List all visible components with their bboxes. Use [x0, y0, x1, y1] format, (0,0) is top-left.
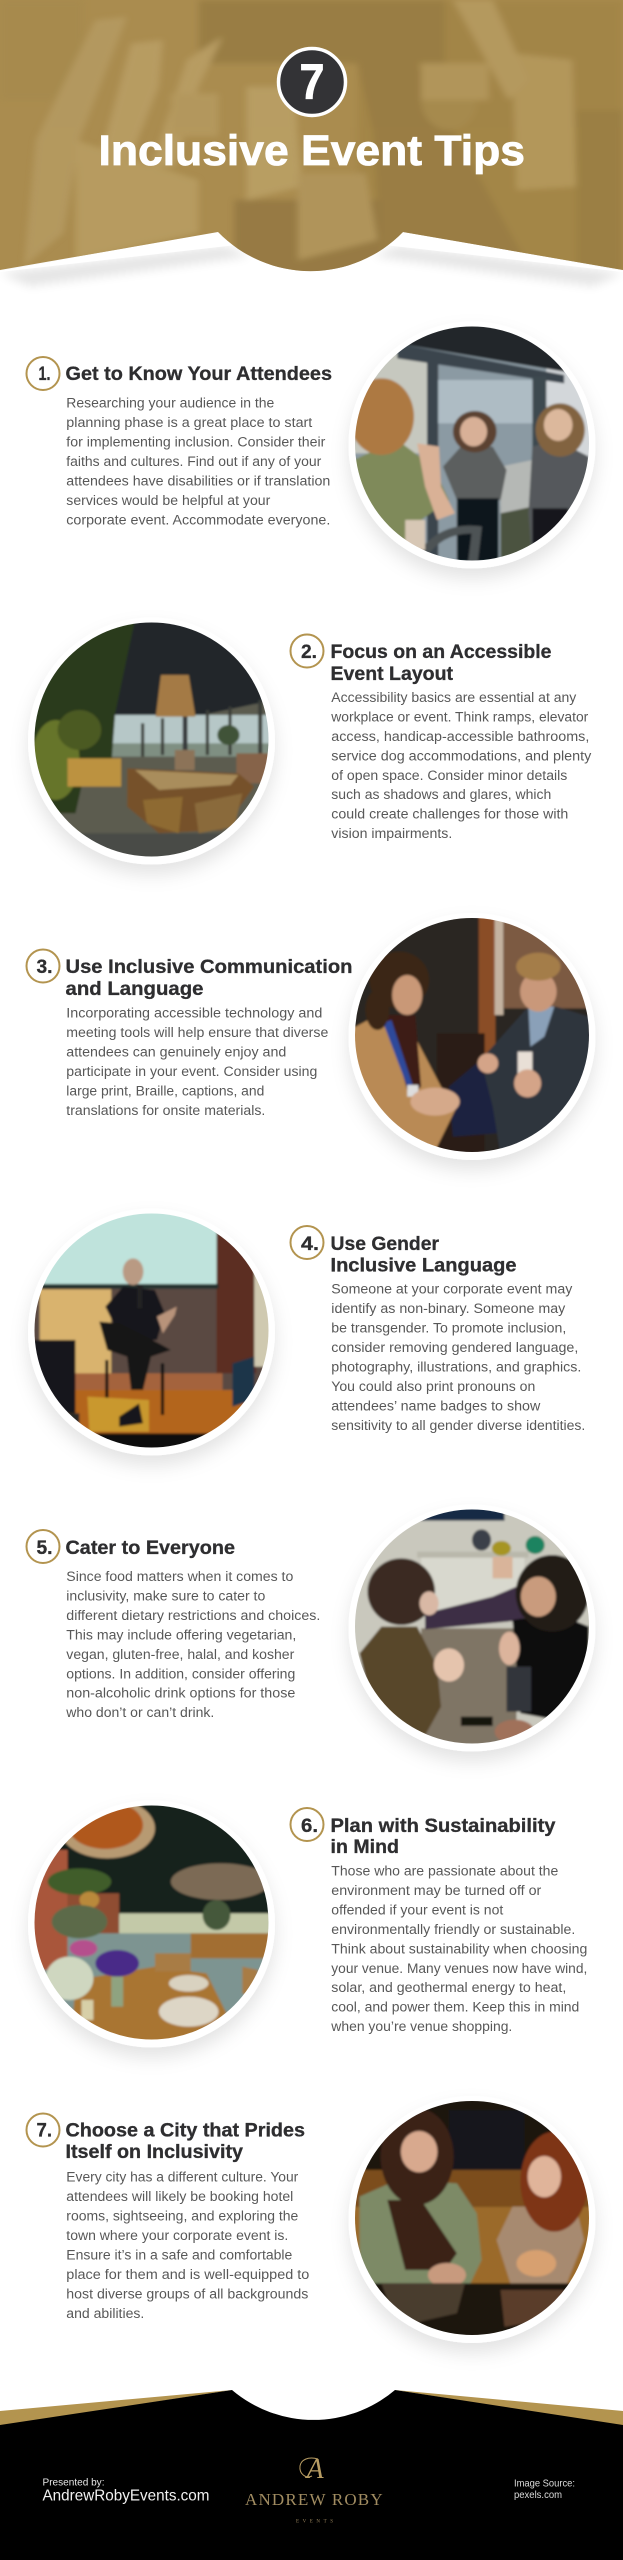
- footer black band: [0, 2390, 623, 2560]
- body text 5: Since food matters when it comes to: [66, 1569, 293, 1584]
- body text 3: meeting tools will help ensure that diverse: [66, 1025, 328, 1040]
- header number badge: 7: [300, 54, 324, 110]
- panel: tip 5: [26, 1504, 596, 1752]
- body text 2: vision impairments.: [331, 826, 452, 841]
- body text 2: service dog accommodations, and plenty: [331, 748, 592, 763]
- body text 2: workplace or event. Think ramps, elevator: [330, 710, 589, 724]
- heading 6: [330, 1815, 556, 1858]
- image source credit: Image Source:: [514, 2478, 575, 2490]
- photo: two men talking: [348, 913, 596, 1160]
- panel: header: [0, 0, 623, 286]
- body text 3: large print, Braille, captions, and: [66, 1083, 264, 1098]
- body text 7: [66, 2170, 309, 2321]
- number badge 2: 2.: [301, 641, 317, 663]
- image source credit: pexels.com: [514, 2489, 562, 2501]
- body text 6: Think about sustainability when choosing: [331, 1941, 587, 1956]
- body text 7: attendees will likely be booking hotel: [66, 2189, 293, 2204]
- logo: Andrew Roby Events: ANDREW ROBY: [245, 2490, 383, 2509]
- body text 1: services would be helpful at your: [66, 493, 271, 508]
- header shadow: [0, 232, 623, 286]
- title: Inclusive Event Tips: [98, 128, 525, 175]
- body text 3: Incorporating accessible technology and: [66, 1006, 322, 1020]
- body text 6: [330, 1864, 587, 2034]
- photo: two women smiling at a bar: [348, 2096, 596, 2343]
- panel: tip 6: [28, 1798, 587, 2048]
- body text 5: who don’t or can’t drink.: [65, 1705, 214, 1720]
- panel: tip 4: [28, 1208, 585, 1456]
- body text 2: [330, 690, 592, 841]
- heading 1: Get to Know Your Attendees: [66, 363, 332, 385]
- logo monogram: A: [304, 2454, 324, 2485]
- body text 7: place for them and is well-equipped to: [66, 2267, 309, 2282]
- body text 7: host diverse groups of all backgrounds: [66, 2286, 309, 2301]
- heading 4: [330, 1233, 517, 1277]
- number badge 1: 1.: [38, 363, 50, 385]
- body text 5: This may include offering vegetarian,: [66, 1627, 296, 1642]
- photo: banquet table with flowers: [28, 1798, 275, 2048]
- heading 2: [330, 641, 552, 685]
- logo: Andrew Roby Events: EVENTS: [296, 2520, 333, 2525]
- body text 5: options. In addition, consider offering: [66, 1666, 295, 1681]
- heading 4: Use Gender: [330, 1233, 439, 1255]
- body text 2: access, handicap-accessible bathrooms,: [331, 729, 589, 744]
- heading 6: in Mind: [330, 1836, 399, 1858]
- body text 2: could create challenges for those with: [331, 807, 568, 822]
- heading 7: Choose a City that Prides: [66, 2120, 305, 2142]
- photo: two women with sparklers: [348, 1504, 596, 1752]
- presented by credit: [42, 2477, 210, 2505]
- body text 5: different dietary restrictions and choices.: [66, 1608, 320, 1623]
- body text 1: attendees have disabilities or if translation: [66, 474, 330, 488]
- number badge 5: 5.: [36, 1537, 52, 1559]
- number badge 5: [26, 1530, 60, 1563]
- photo: speaker on stage: [28, 1208, 275, 1456]
- photo: three women toasting: [348, 322, 596, 568]
- body text 4: photography, illustrations, and graphics.: [331, 1360, 581, 1374]
- body text 6: environment may be turned off or: [331, 1883, 542, 1898]
- panel: footer: [0, 2390, 623, 2560]
- body text 5: vegan, gluten-free, halal, and kosher: [66, 1647, 295, 1662]
- header number badge: [278, 48, 346, 116]
- body text 2: such as shadows and glares, which: [331, 787, 551, 802]
- body text 6: environmentally friendly or sustainable.: [331, 1922, 575, 1937]
- heading 3: and Language: [66, 978, 204, 1000]
- body text 7: rooms, sightseeing, and exploring the: [66, 2209, 298, 2224]
- presented by credit: AndrewRobyEvents.com: [42, 2488, 210, 2505]
- body text 6: solar, and geothermal energy to heat,: [331, 1980, 566, 1995]
- body text 4: identify as non-binary. Someone may: [331, 1301, 566, 1316]
- photo: restaurant venue: [28, 618, 275, 864]
- body text 5: inclusivity, make sure to cater to: [66, 1588, 265, 1604]
- body text 4: You could also print pronouns on: [331, 1379, 535, 1394]
- logo: Andrew Roby Events: [245, 2454, 383, 2525]
- body text 5: [65, 1569, 320, 1720]
- body text 3: translations for onsite materials.: [66, 1103, 265, 1118]
- heading 2: Focus on an Accessible: [330, 641, 552, 663]
- heading 2: Event Layout: [330, 663, 454, 685]
- panel: tip 3: [26, 913, 596, 1160]
- number badge 4: [290, 1226, 324, 1259]
- header photo with gold overlay: [0, 0, 623, 280]
- body text 2: of open space. Consider minor details: [331, 768, 568, 783]
- image source credit: [514, 2478, 575, 2501]
- body text 1: for implementing inclusion. Consider their: [66, 435, 326, 450]
- body text 3: [66, 1006, 328, 1118]
- body text 3: participate in your event. Consider using: [66, 1064, 317, 1079]
- body text 1: faiths and cultures. Find out if any of your: [66, 454, 322, 469]
- panel: tip 2: [28, 618, 592, 864]
- body text 1: corporate event. Accommodate everyone.: [66, 512, 330, 527]
- number badge 3: [26, 950, 60, 982]
- body text 1: Researching your audience in the: [66, 396, 274, 411]
- panel: tip 1: [26, 322, 596, 568]
- heading 5: Cater to Everyone: [66, 1537, 235, 1559]
- heading 3: [66, 956, 352, 1000]
- body text 7: Every city has a different culture. Your: [66, 2170, 299, 2185]
- body text 6: cool, and power them. Keep this in mind: [331, 2000, 579, 2015]
- heading 3: Use Inclusive Communication: [66, 956, 352, 978]
- body text 2: Accessibility basics are essential at any: [331, 690, 577, 705]
- body text 1: [66, 396, 330, 527]
- body text 4: Someone at your corporate event may: [331, 1282, 573, 1297]
- number badge 2: [290, 634, 324, 668]
- body text 4: attendees’ name badges to show: [331, 1398, 541, 1413]
- body text 4: be transgender. To promote inclusion,: [331, 1321, 566, 1336]
- body text 4: [331, 1282, 585, 1433]
- number badge 3: 3.: [36, 956, 52, 978]
- body text 6: your venue. Many venues now have wind,: [331, 1961, 587, 1976]
- body text 3: attendees can genuinely enjoy and: [66, 1044, 286, 1059]
- body text 7: town where your corporate event is.: [66, 2228, 288, 2243]
- number badge 7: [26, 2114, 60, 2146]
- body text 7: and abilities.: [66, 2306, 144, 2321]
- number badge 1: [26, 357, 60, 390]
- body text 6: Those who are passionate about the: [331, 1864, 558, 1878]
- body text 5: non-alcoholic drink options for those: [66, 1686, 295, 1701]
- heading 4: Inclusive Language: [330, 1255, 517, 1277]
- heading 7: [66, 2120, 305, 2163]
- number badge 6: 6.: [301, 1815, 318, 1837]
- heading 7: Itself on Inclusivity: [66, 2141, 243, 2163]
- body text 6: offended if your event is not: [331, 1902, 504, 1917]
- body text 7: Ensure it’s in a safe and comfortable: [66, 2248, 292, 2262]
- number badge 7: 7.: [36, 2120, 52, 2142]
- heading 6: Plan with Sustainability: [330, 1815, 556, 1837]
- footer gold accents: [0, 2390, 623, 2426]
- body text 6: when you’re venue shopping.: [330, 2019, 512, 2034]
- presented by credit: Presented by:: [42, 2477, 104, 2489]
- body text 4: sensitivity to all gender diverse identities.: [331, 1418, 585, 1433]
- body text 4: consider removing gendered language,: [331, 1340, 578, 1355]
- body text 1: planning phase is a great place to start: [66, 415, 313, 430]
- panel: tip 7: [26, 2096, 596, 2343]
- number badge 6: [290, 1808, 324, 1841]
- number badge 4: 4.: [301, 1233, 319, 1255]
